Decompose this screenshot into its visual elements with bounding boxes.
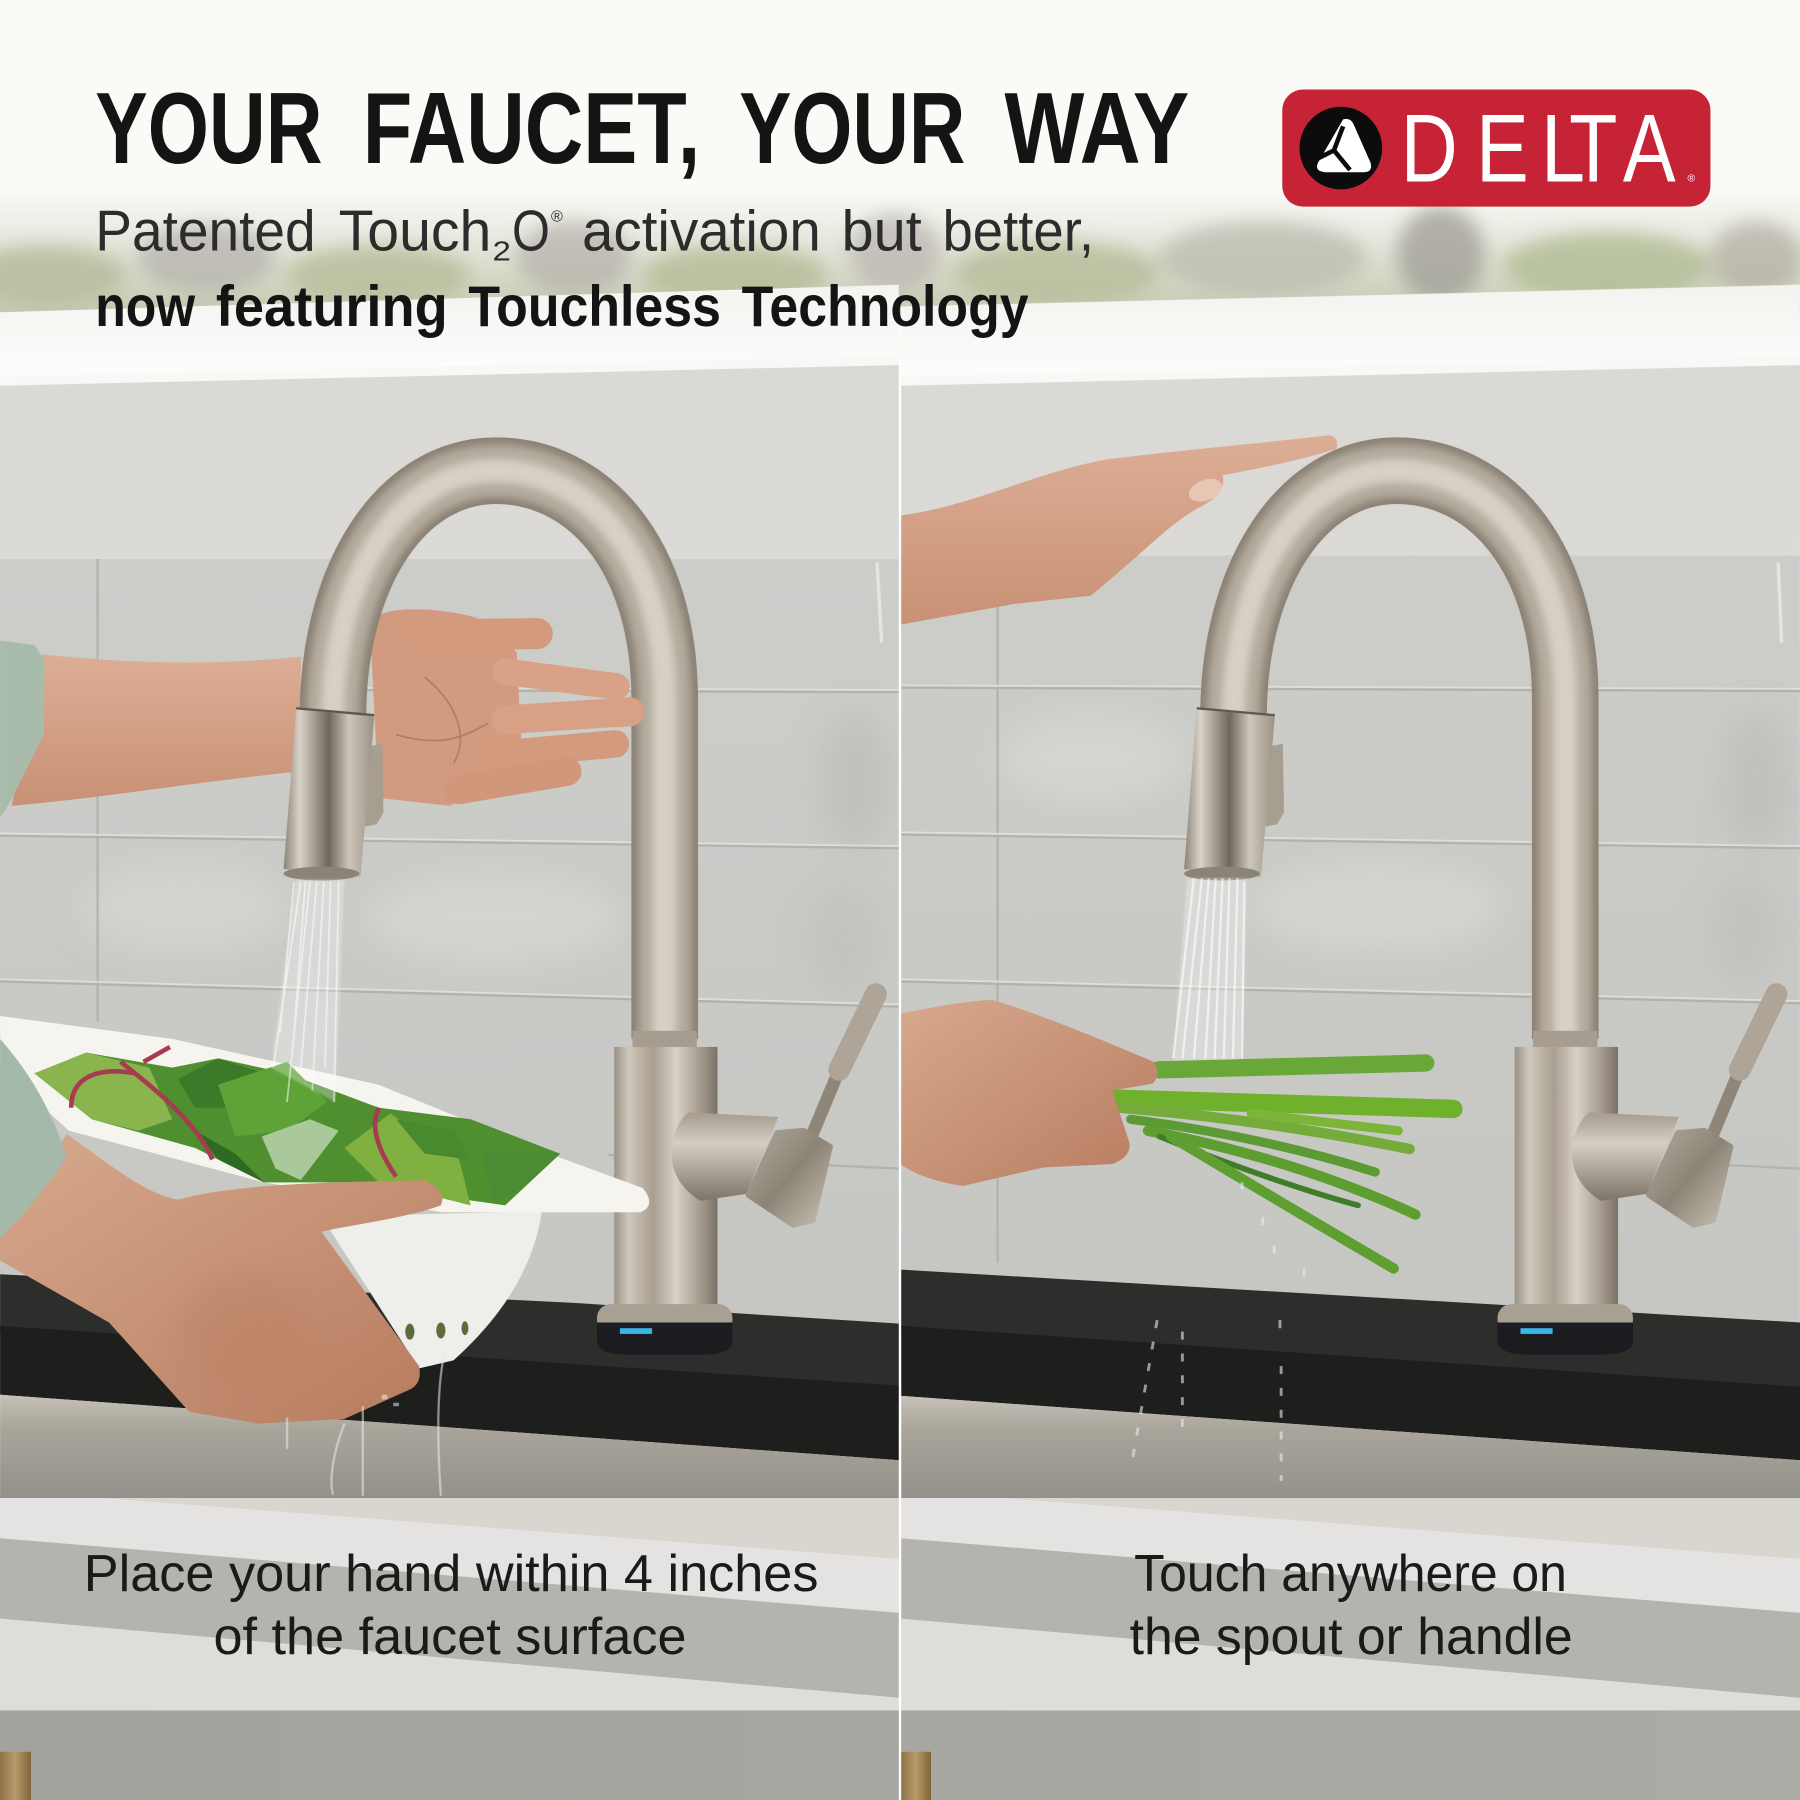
touching hand [901,435,1337,624]
window sill [901,285,1800,379]
faucet body [1515,1031,1618,1309]
bottom cabinet strip [0,1710,1800,1800]
handle [1572,994,1776,1225]
subtitle line one: but [841,199,922,263]
logo: Delta: ® [1688,173,1696,184]
brass handle, right [901,1752,931,1800]
title: YOUR [95,73,323,185]
sink edge [901,1396,1800,1498]
sink edge [0,1395,899,1498]
subtitle line two [95,275,1029,339]
caption text, left [84,1544,818,1665]
subtitle line one: Patented [95,199,316,263]
subtitle line one: ® [551,208,563,226]
pull-down wand [1184,708,1284,880]
title: YOUR [739,73,965,185]
panel divider [899,358,901,1800]
tile backsplash [0,559,899,1340]
title: FAUCET, [363,73,700,185]
brass handle, left [0,1752,31,1800]
pull-down wand [284,708,383,880]
salad leaves [34,1047,560,1205]
water drips [1131,1182,1304,1481]
subtitle line one: Touch [339,199,491,263]
holding hand [900,1000,1157,1186]
colander rim [0,1016,649,1212]
fingertips in front of riser [608,685,630,713]
subtitle line one [95,199,1094,267]
title: WAY [1004,73,1189,185]
panel: right photo, touch activation [900,285,1800,1498]
subtitle line two: featuring [216,275,448,339]
caption strip, left [0,1498,899,1710]
sleeve [0,641,45,817]
base with LED [1498,1304,1633,1355]
caption text, right: Touch anywhere on [1134,1544,1567,1602]
base with LED [597,1304,732,1355]
subtitle line one: activation [582,199,821,263]
wall [901,364,1800,562]
water stream [1173,878,1247,1062]
spout arch [1233,471,1565,1039]
subtitle line one: O [512,199,550,263]
arm and sensing hand [11,609,630,806]
title [95,73,1189,185]
wordmark: DELTA [1401,94,1676,202]
subtitle line two: Technology [742,275,1029,339]
subtitle line two: now [95,275,195,339]
caption text, left: Place your hand within 4 inches [84,1544,818,1602]
icon: Delta triangle mark [1299,107,1382,189]
colander with salad [0,1016,649,1368]
colander bowl [321,1211,542,1368]
handle [672,994,876,1225]
wall [0,364,899,562]
water drips [287,1349,445,1496]
window sill [0,285,899,379]
background: hazy window landscape [0,0,1800,316]
countertop [901,1270,1800,1460]
tile backsplash [901,556,1800,1336]
colander holes [405,1321,468,1340]
holding hand and arm [0,1134,442,1423]
water stream [271,879,344,1102]
faucet [284,471,876,1355]
subtitle line one: better, [942,199,1094,263]
countertop [0,1274,899,1460]
caption text, right [1130,1544,1573,1665]
subtitle line one: 2 [492,236,511,267]
spout arch [333,471,665,1039]
caption strip, right [901,1498,1800,1710]
subtitle line two: Touchless [468,275,721,339]
logo: Delta [1282,90,1710,207]
caption text, right: the spout or handle [1130,1607,1573,1665]
faucet [1184,471,1776,1355]
sleeve, holding arm [0,1039,67,1238]
green onions [1114,1063,1453,1268]
panel: left photo, hands-free sensing [0,285,899,1498]
thumbnail [1186,475,1225,506]
caption text, left: of the faucet surface [214,1607,686,1665]
faucet body [614,1031,717,1309]
